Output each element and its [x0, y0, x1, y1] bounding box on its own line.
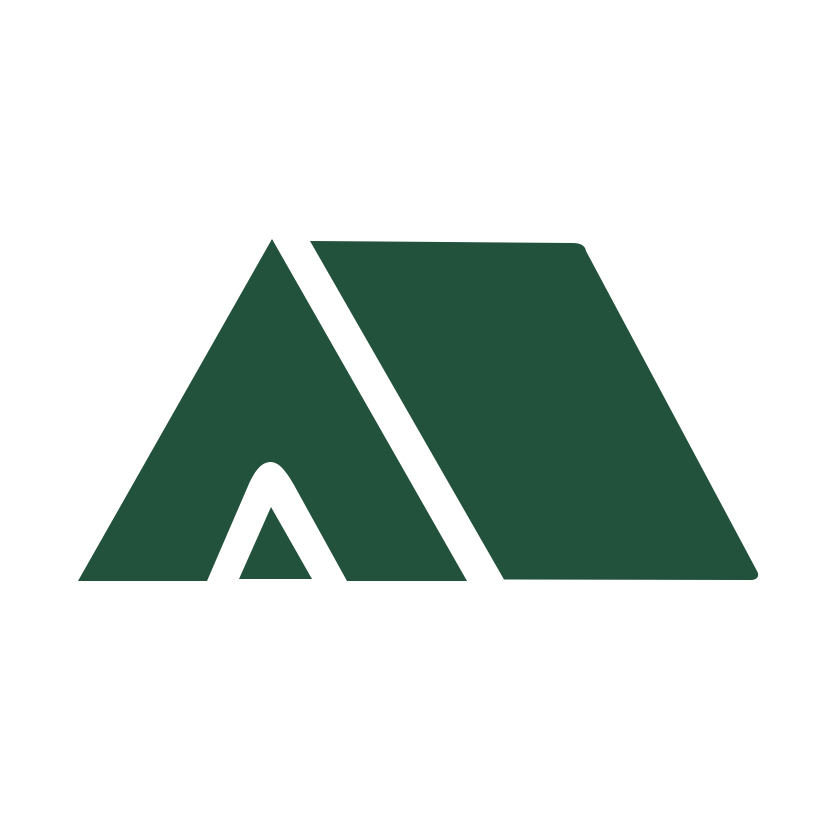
- tent side panel: [310, 241, 758, 580]
- tent door inner triangle: [239, 507, 312, 579]
- tent front panel with door opening: [78, 239, 467, 581]
